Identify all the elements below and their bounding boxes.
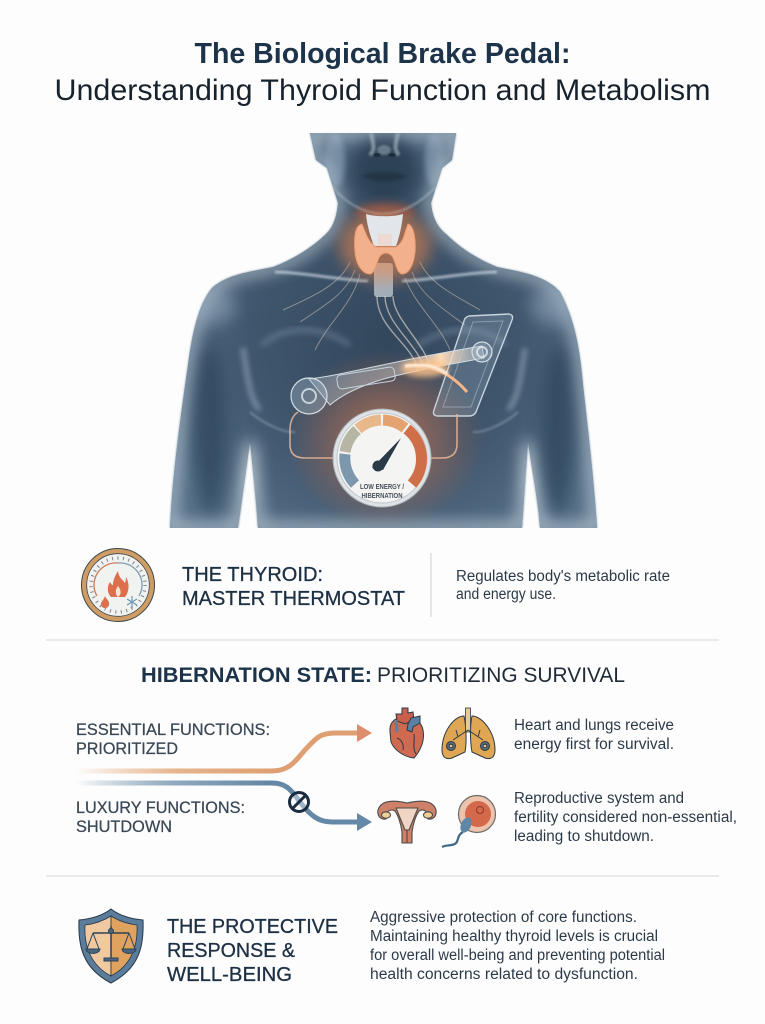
- protective response paragraph: for overall well-being and preventing potential: [370, 947, 665, 964]
- snowflake: [127, 596, 137, 608]
- connector circuit line: [290, 412, 457, 458]
- protective response paragraph: [370, 909, 665, 983]
- label: luxury functions: SHUTDOWN: [76, 818, 172, 836]
- protective response heading: WELL-BEING: [167, 964, 292, 986]
- thermostat heading: [182, 564, 405, 610]
- title: Understanding Thyroid Function and Metabolism: [54, 74, 710, 107]
- text: non-essential organs: leading to shutdown.: [514, 828, 654, 845]
- protective response paragraph: Aggressive protection of core functions.: [370, 909, 637, 926]
- title: [54, 38, 710, 107]
- thyroid gland: [339, 209, 431, 281]
- icon: lungs: [442, 708, 495, 759]
- icon: uterus: [378, 801, 436, 843]
- section heading: hibernation state: PRIORITIZING SURVIVAL: [377, 664, 625, 687]
- text: essential organs: Heart and lungs receive: [514, 717, 674, 734]
- text: non-essential organs: fertility considered non-essential,: [514, 809, 737, 826]
- section heading: hibernation state: [141, 664, 625, 687]
- text: essential organs: energy first for survival.: [514, 736, 674, 753]
- brake lever arm: [291, 342, 492, 414]
- label: essential functions: PRIORITIZED: [76, 740, 178, 758]
- icon: blocked symbol: [290, 792, 308, 812]
- face features: [362, 133, 407, 181]
- icon: heart: [390, 708, 424, 758]
- dial gauge: [333, 409, 431, 507]
- brake pedal plate: [433, 314, 513, 416]
- thermostat description: and energy use.: [456, 586, 556, 603]
- text: non-essential organs: [514, 790, 737, 845]
- torso silhouette: [150, 132, 620, 528]
- thermostat heading: MASTER THERMOSTAT: [182, 588, 405, 610]
- protective response heading: THE PROTECTIVE: [167, 916, 338, 938]
- protective response paragraph: Maintaining healthy thyroid levels is crucial: [370, 928, 658, 945]
- protective response heading: [167, 916, 338, 986]
- label: luxury functions: LUXURY FUNCTIONS:: [76, 799, 245, 817]
- thermostat description: [456, 568, 670, 603]
- icon: thermostat badge with flame: [82, 548, 154, 622]
- arrow: essential pathway: [76, 724, 372, 771]
- label: essential functions: [76, 721, 270, 758]
- text: non-essential organs: Reproductive system and: [514, 790, 684, 807]
- arrow: shutdown pathway: [76, 783, 372, 831]
- label: luxury functions: [76, 799, 245, 836]
- icon: egg and sperm: [442, 796, 496, 847]
- dial gauge: HIBERNATION: [362, 493, 402, 500]
- thermostat heading: THE THYROID:: [182, 564, 323, 586]
- trachea tube: [374, 263, 430, 372]
- protective response paragraph: health concerns related to dysfunction.: [370, 966, 638, 983]
- protective response heading: RESPONSE &: [167, 940, 296, 962]
- section heading: hibernation state: HIBERNATION STATE:: [141, 664, 372, 687]
- chest glow: [293, 356, 477, 520]
- central illustration: human torso with thyroid, brake lever and gauge: [150, 132, 620, 530]
- dial gauge: LOW ENERGY /: [360, 482, 405, 491]
- icon: shield with scales: [79, 909, 143, 983]
- text: essential organs: [514, 717, 674, 753]
- thermostat description: Regulates body's metabolic rate: [456, 568, 670, 585]
- title: The Biological Brake Pedal:: [194, 38, 570, 70]
- nerve lines from thyroid: [283, 262, 480, 350]
- label: essential functions: ESSENTIAL FUNCTIONS:: [76, 721, 270, 739]
